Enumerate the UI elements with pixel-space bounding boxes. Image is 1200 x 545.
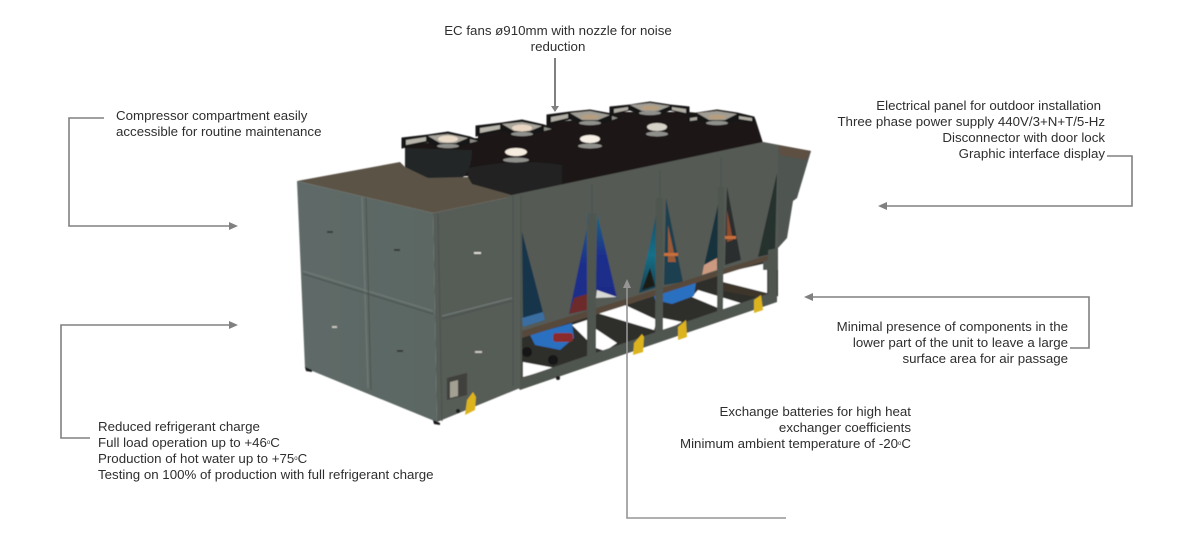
fan mass: [405, 112, 763, 197]
leader: exchange batteries: [623, 279, 786, 518]
top surface: [297, 162, 520, 213]
frame posts and base: [513, 187, 777, 390]
text: compressor compartment: [116, 108, 321, 139]
leader: compressor compartment: [69, 118, 238, 230]
text: electrical panel: Graphic interface display: [959, 146, 1105, 161]
fan bodies: [405, 148, 562, 195]
leader: lower part: [804, 293, 1089, 348]
fan hubs: [437, 106, 728, 162]
text: EC fans: [444, 23, 672, 54]
leader: electrical panel: [878, 156, 1132, 210]
coil gaps: [522, 173, 777, 327]
yellow lifting brackets: [465, 295, 763, 415]
text: lower part of the unit: lower part of the unit to leave a large: [853, 335, 1068, 350]
text: refrigerant charge: Testing on 100% of production with full refrigerant charge: [98, 467, 434, 482]
text: exchange batteries: Minimum ambient temperature of -20oC: [680, 436, 911, 451]
text: refrigerant charge: [98, 419, 434, 482]
unit right hood: [763, 142, 811, 270]
text: EC fans: reduction: [531, 39, 585, 54]
text: refrigerant charge: Full load operation up to +46oC: [98, 435, 280, 450]
compressor compartment front face: [433, 195, 520, 422]
leader: EC fans: [551, 58, 559, 112]
leader: refrigerant: [61, 321, 238, 438]
rail over interior: [522, 254, 772, 338]
text: electrical panel: [837, 98, 1105, 161]
text: compressor compartment: Compressor compartment easily: [116, 108, 307, 123]
fan guard 2: [476, 120, 554, 136]
fan guard 1: [402, 132, 480, 148]
text: lower part of the unit: [837, 319, 1068, 366]
text: lower part of the unit: surface area for air passage: [902, 351, 1068, 366]
text: electrical panel: Three phase power supply 440V/3+N+T/5-Hz: [837, 114, 1105, 129]
text: refrigerant charge: Production of hot water up to +75oC: [98, 451, 307, 466]
fan guard 5: [688, 110, 754, 124]
fan guard 3: [547, 110, 620, 125]
service window: [447, 373, 467, 400]
text: compressor compartment: accessible for routine maintenance: [116, 124, 321, 139]
text: exchange batteries: exchanger coefficients: [779, 420, 911, 435]
feet: [305, 367, 312, 372]
text: lower part of the unit: Minimal presence of components in the: [837, 319, 1068, 334]
text: EC fans: EC fans ø910mm with nozzle for noise: [444, 23, 672, 38]
panel seams and handles: [303, 197, 512, 388]
text: exchange batteries: Exchange batteries for high heat: [720, 404, 911, 419]
fan guard 4: [610, 102, 689, 115]
text: electrical panel: Electrical panel for outdoor installation: [876, 98, 1101, 113]
text: electrical panel: Disconnector with door lock: [942, 130, 1105, 145]
compressor compartment left face: [297, 181, 437, 422]
interior under coils: [520, 250, 778, 384]
text: refrigerant charge: Reduced refrigerant charge: [98, 419, 260, 434]
text: exchange batteries: [680, 404, 911, 451]
coil panels face: [507, 142, 778, 338]
